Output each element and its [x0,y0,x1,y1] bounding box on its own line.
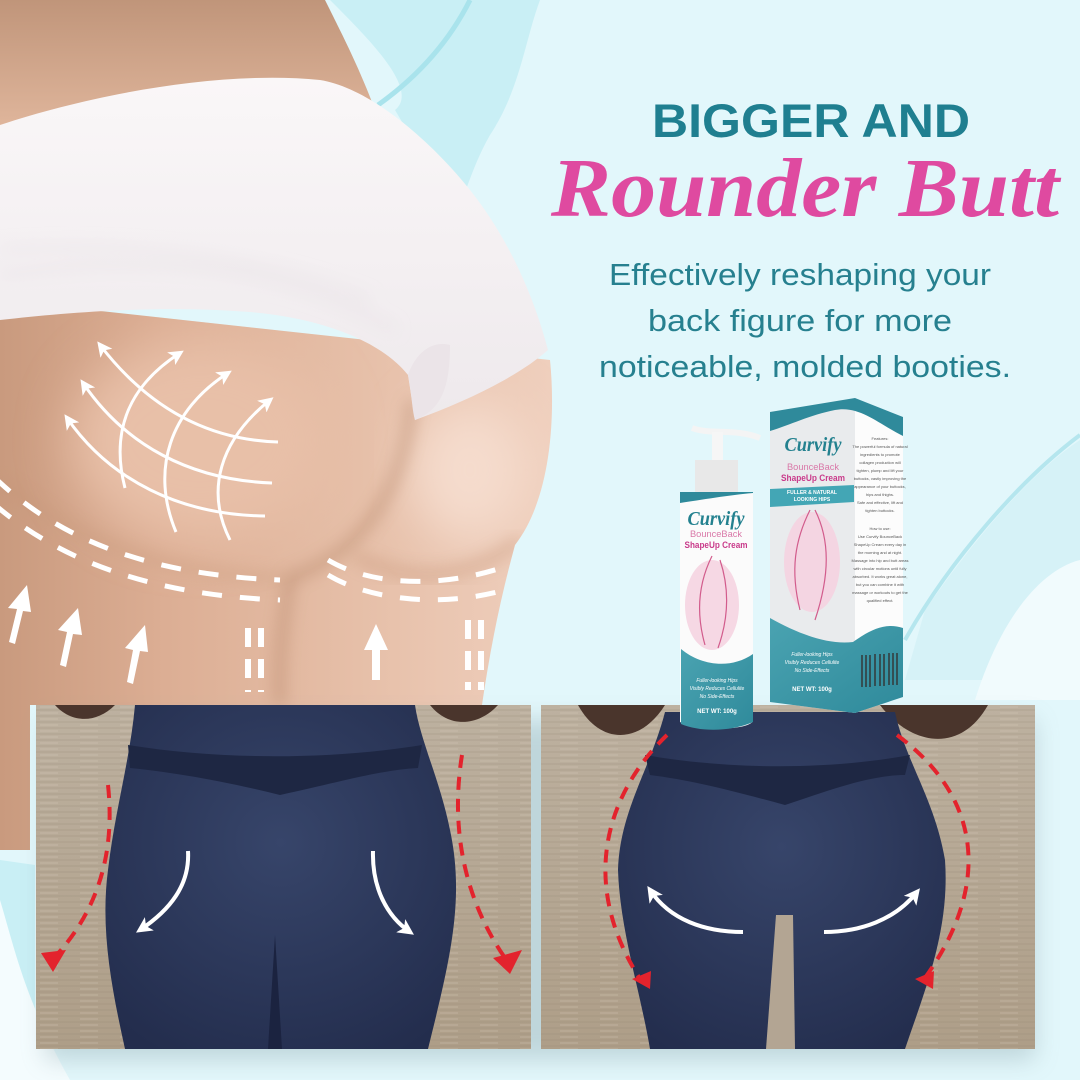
product: bottle: BounceBack [690,529,742,539]
product: box: massage or workouts to get the [852,590,909,595]
description: Effectively reshaping your [609,257,991,292]
product: box: Safe and effective, lift and [857,500,903,505]
panel shadows [45,720,1035,1060]
product: box: Massage into hip and butt areas [852,558,908,563]
photo: torso and hips [0,0,552,850]
product: box: tighten buttocks. [865,508,895,513]
product: bottle: Curvify [688,508,745,530]
product: box: with circular motions until fully [854,566,906,571]
barcode [862,653,897,687]
product: bottle: Fuller-looking Hips [696,678,738,684]
arrows on hip [67,345,278,540]
product: box: buttocks, vastly improving the [854,476,907,481]
product: box: The powerful formula of natural [852,444,908,449]
product: box: Visibly Reduces Cellulite [785,660,840,666]
product: bottle: ShapeUp Cream [684,540,748,550]
heading: Rounder Butt [550,142,1062,235]
product: box: Features: [872,436,888,441]
panel: before [36,705,531,1049]
product: box: NET WT: 100g [792,687,832,693]
product: bottle: Visibly Reduces Cellulite [690,686,745,692]
product: box: but you can combine it with [856,582,904,587]
product: box [770,398,909,713]
product: box: LOOKING HIPS [794,497,831,503]
heading [550,94,1062,235]
product: box: absorbed. It works great alone, [853,574,907,579]
product: box: appearance of your buttocks, [854,484,906,489]
product: box: FULLER & NATURAL [787,490,837,496]
product: box: Curvify [784,434,842,456]
product: box: Use Curvify BounceBack [858,534,902,539]
product: box: ingredients to promote [860,452,901,457]
product: box: hips and thighs. [866,492,894,497]
product: bottle [680,428,760,730]
product: box: collagen production will [859,460,901,465]
product: box: the morning and at night. [858,550,902,555]
product: box: qualified effect. [867,598,893,603]
product: box: ShapeUp Cream [781,473,845,484]
up arrows [8,585,388,684]
product: box: ShapeUp Cream every day in [854,542,906,547]
panel: after [541,705,1035,1049]
product: box: How to use: [869,526,891,531]
description [599,257,1011,384]
product: bottle: NET WT: 100g [697,709,737,715]
product: bottle: No Side-Effects [700,694,735,700]
product: box: BounceBack [787,462,839,473]
product: box: Fuller-looking Hips [791,652,833,658]
description: noticeable, molded booties. [599,349,1011,384]
dashed contour lines [0,478,510,692]
product: box: tighten, plump and lift your [857,468,904,473]
heading: BIGGER AND [652,94,970,147]
description: back figure for more [648,303,952,338]
product: box: No Side-Effects [795,668,830,674]
